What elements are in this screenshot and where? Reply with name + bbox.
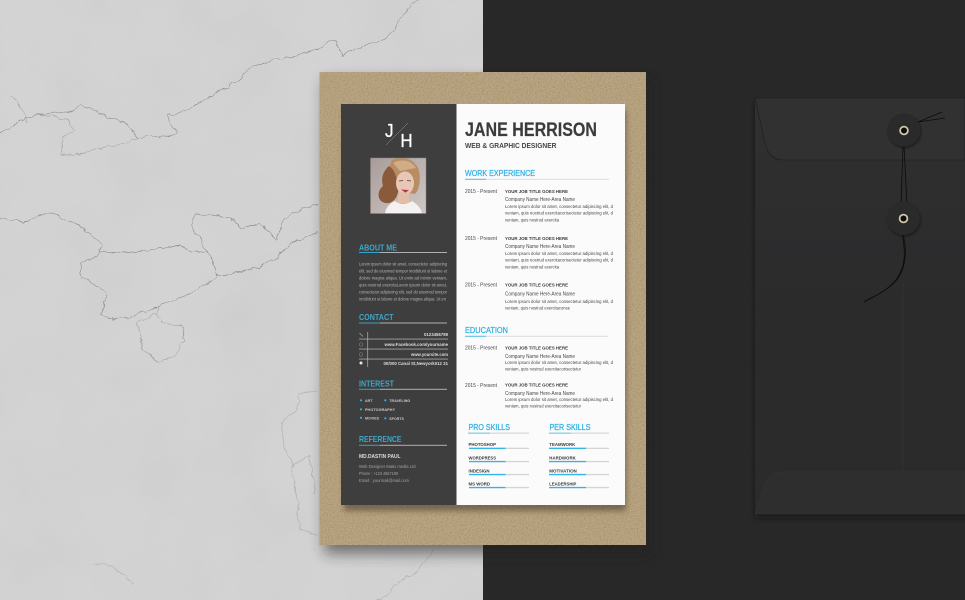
heading: reference	[359, 434, 447, 446]
contact text	[384, 332, 448, 366]
education entry 2: Lorem ipsum dolor sit amet, consectetur adipiscing elit, d	[505, 397, 614, 402]
monogram J/H: J	[385, 121, 394, 141]
portrait photo	[370, 158, 426, 214]
contact text: 0123456789	[424, 332, 448, 337]
board shadow	[324, 80, 650, 554]
panel: resume sidebar	[341, 104, 456, 505]
contact text: www.Facebook.com/yourname	[384, 342, 448, 347]
job entry 3: YOUR JOB TITLE GOES HERE	[505, 282, 569, 288]
panel: black string-tie envelope	[755, 98, 965, 518]
job entry 3: Lorem ipsum dolor sit amet, consectetur adipiscing elit, d	[505, 299, 614, 304]
tie string	[864, 112, 945, 302]
interest list: PHOTOGRAPHY	[365, 407, 395, 412]
education entry 1: YOUR JOB TITLE GOES HERE	[505, 345, 569, 351]
marble cracks	[0, 0, 433, 600]
reference details: Web Designer Matix media Ltd	[359, 464, 416, 469]
education entry 2: veniam, quis nostrud exercitacorisectetur	[505, 404, 581, 408]
pro skills chart	[468, 422, 529, 488]
per skills chart: PER SKILLS	[550, 422, 591, 432]
job entry 2: veniam, quis nostrud exercitacorisectetur adipiscing elit, d	[505, 258, 614, 262]
pro skills chart: PHOTOSHOP	[468, 442, 496, 447]
panel: resume main column	[456, 104, 625, 505]
job entry 2: 2015 - Present	[465, 236, 497, 242]
job entry 2: Lorem ipsum dolor sit amet, consectetur adipiscing elit, d	[505, 251, 614, 256]
job entry 3: 2015 - Present	[465, 282, 497, 288]
top washer	[888, 114, 922, 148]
heading: contact: CONTACT	[359, 312, 394, 322]
text: about me paragraph: Lorem ipsum dolor sit amet, consectetur adipiscing	[359, 262, 447, 266]
panel: dark paper background	[483, 0, 965, 600]
per skills chart: HARDWORK	[549, 455, 576, 460]
education entry 2: YOUR JOB TITLE GOES HERE	[505, 383, 569, 389]
monogram J/H	[385, 121, 412, 151]
heading: interest: INTEREST	[359, 378, 395, 388]
text: about me paragraph: elit, sed do eiusmod tempor incididunt ut labore et	[359, 268, 448, 274]
interest list	[360, 398, 410, 421]
title: name: JANE HERRISON	[465, 120, 597, 141]
education entry 2: Company Name Here-Area Name	[505, 391, 575, 397]
job entry 2: YOUR JOB TITLE GOES HERE	[505, 236, 569, 242]
job entry 2	[465, 236, 614, 270]
panel: marble background	[0, 0, 483, 600]
monogram J/H: H	[400, 131, 412, 151]
heading: work experience: WORK EXPERIENCE	[465, 168, 535, 178]
education entry 1: veniam, quis nostrud exercitacorisectetur	[505, 366, 581, 372]
job entry 1: Company Name Here-Area Name	[505, 197, 575, 203]
text: about me paragraph: consectetur adipiscing elit, sed do eiusmod tempor	[359, 290, 447, 294]
envelope top flap	[755, 98, 965, 160]
contact text: 00/000 Canal St,Newyork012 31	[384, 361, 448, 366]
reference details: Phone : +123 4567189	[359, 471, 399, 476]
text: about me paragraph: dolore magna aliqua. Ut enim ad minim veniam,	[359, 276, 447, 280]
per skills chart: LEADERSHIP	[549, 481, 576, 486]
resume shadow	[344, 110, 626, 511]
education entry 1: 2015 - Present	[465, 346, 497, 352]
interest list: ART	[365, 398, 373, 403]
education entry 2	[465, 383, 614, 408]
heading: interest	[359, 378, 447, 390]
job entry 1: Lorem ipsum dolor sit amet, consectetur adipiscing elit, d	[505, 204, 614, 209]
interest list: TRAVELING	[389, 398, 410, 403]
contact text: www.yoursite.com	[410, 352, 448, 357]
per skills chart: MOTIVATION	[549, 468, 577, 473]
envelope bottom flap	[755, 472, 965, 514]
text: about me paragraph: incididunt ut labore et dolore magna aliqua. Ut en	[359, 296, 447, 302]
pro skills chart: WORDPRESS	[468, 455, 496, 460]
subtitle: role: WEB & GRAPHIC DESIGNER	[465, 141, 557, 150]
education entry 1: Lorem ipsum dolor sit amet, consectetur adipiscing elit, d	[505, 360, 614, 365]
job entry 1: veniam, quis nostrud exercitacorisectetur adipiscing elit, d	[505, 211, 614, 216]
text: about me paragraph: quis nostrud exercitaLorem ipsum dolor sit amet,	[359, 282, 447, 288]
envelope centre fold	[902, 280, 904, 472]
job entry 3: Company Name Here-Area Name	[505, 292, 575, 298]
job entry 1	[465, 189, 614, 222]
lower washer	[887, 202, 921, 237]
per skills chart	[549, 422, 609, 488]
heading: about me	[359, 242, 447, 253]
panel: kraft board	[320, 72, 646, 545]
pro skills chart: PRO SKILLS	[468, 422, 510, 432]
pro skills chart: INDESIGN	[468, 468, 490, 473]
job entry 3: veniam, quis nostrud exercitaconse	[505, 306, 571, 311]
reference details	[359, 454, 416, 483]
job entry 3	[465, 282, 614, 311]
education entry 2: 2015 - Present	[465, 383, 497, 389]
pro skills chart: MS WORD	[468, 481, 491, 486]
reference details: Email : yourmail@mail.com	[359, 478, 409, 483]
icon: location	[360, 362, 362, 364]
interest list: SPORTS	[389, 416, 404, 421]
icon: phone	[360, 333, 363, 336]
heading: reference: REFERENCE	[359, 434, 402, 444]
icon: facebook	[359, 343, 363, 346]
education entry 1	[465, 345, 614, 372]
heading: contact	[359, 312, 447, 324]
education entry 1: Company Name Here-Area Name	[505, 354, 575, 360]
reference details: MD.DASTIN PAUL	[359, 454, 400, 460]
icon: website	[359, 353, 363, 356]
interest list: MOVIES	[365, 415, 379, 420]
heading: about me: ABOUT ME	[359, 242, 397, 252]
text: about me paragraph	[359, 262, 448, 302]
job entry 1: veniam, quis nostrud exercita	[505, 218, 560, 222]
job entry 1: 2015 - Present	[465, 189, 497, 195]
contact list	[359, 332, 448, 367]
job entry 2: veniam, quis nostrud exercita	[505, 264, 560, 270]
job entry 1: YOUR JOB TITLE GOES HERE	[505, 189, 569, 195]
heading: education: EDUCATION	[465, 325, 508, 335]
per skills chart: TEAMWORK	[549, 442, 576, 447]
job entry 2: Company Name Here-Area Name	[505, 244, 575, 250]
